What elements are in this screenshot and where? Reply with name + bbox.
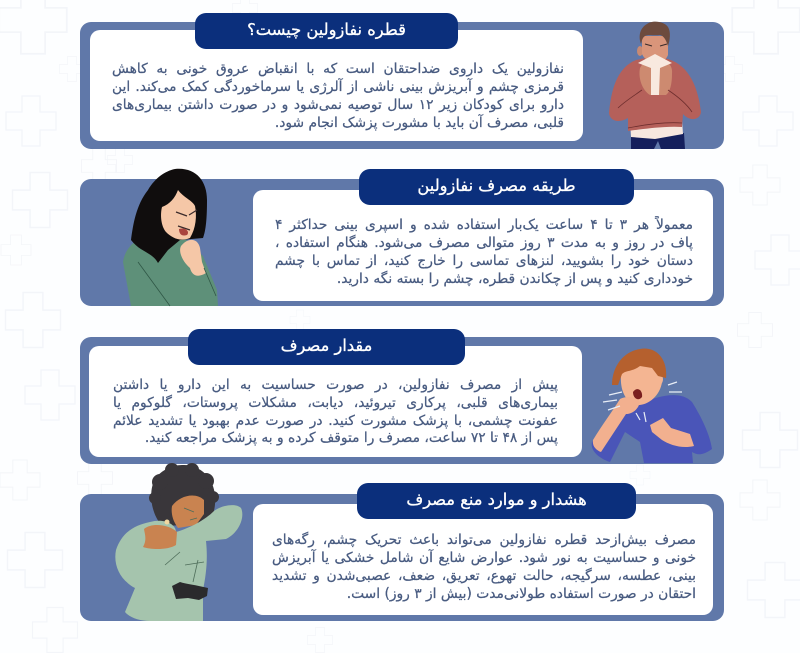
heading 1 xyxy=(195,13,458,49)
heading 2: طریقه مصرف نفازولین xyxy=(417,176,576,195)
text block 3: پیش از مصرف نفازولین، در صورت حساسیت به این دارو یا داشتن xyxy=(113,377,558,393)
text block 4 xyxy=(272,532,696,602)
heading 4 xyxy=(357,483,636,519)
text card 3 xyxy=(89,346,582,457)
text block 4: خونی و حساسیت به نور شود. عوارض شایع آن شامل خشکی یا آبریزش xyxy=(272,550,696,566)
panel: what is naphazoline xyxy=(80,22,724,149)
text block 2: دستان خود را بشویید، لنزهای تماسی را خارج کنید، از تماس با چشم xyxy=(275,253,693,269)
text block 4: احتقان در صورت استفاده طولانی‌مدت (بیش از ۳ روز) است. xyxy=(347,586,696,602)
text block 2 xyxy=(275,216,693,287)
text block 2: پاف در روز و به مدت ۳ روز متوالی مصرف می‌شود. هنگام استفاده ، xyxy=(275,235,693,251)
heading 4: هشدار و موارد منع مصرف xyxy=(406,490,587,509)
icon: woman coughing into elbow xyxy=(115,463,242,621)
heading 1: قطره نفازولین چیست؟ xyxy=(247,20,406,39)
panel: how to use xyxy=(80,179,724,306)
text block 3: عفونت چشمی، با پزشک مشورت کنید. در صورت عدم بهبود یا تشدید علائم xyxy=(113,413,558,429)
heading 3 xyxy=(188,329,465,365)
text block 1: قرمزی چشم و آبریزش بینی ناشی از آلرژی یا سرماخوردگی کمک می‌کند. این xyxy=(112,79,564,95)
text card 4 xyxy=(253,504,713,615)
text block 1: دارو برای کودکان زیر ۱۲ سال توصیه نمی‌شود و در صورت داشتن بیماری‌های xyxy=(112,97,564,113)
heading 2 xyxy=(359,169,634,205)
text block 2: خودداری کنید و پس از چکاندن قطره، چشم را بسته نگه دارید. xyxy=(337,271,693,287)
text block 3: بیماری‌های قلبی، پرکاری تیروئید، دیابت، مشکلات پروستات، گلوکوم یا xyxy=(113,395,558,411)
text block 2: معمولاً هر ۳ تا ۴ ساعت یک‌بار استفاده شده و اسپری بینی حداکثر ۴ xyxy=(275,217,693,233)
text card 2 xyxy=(253,190,713,301)
heading 3: مقدار مصرف xyxy=(281,336,372,355)
text block 4: بینی، عطسه، سرگیجه، حالت تهوع، تعریق، ضعف، عصبی‌شدن و تشدید xyxy=(272,568,696,584)
text block 1 xyxy=(112,61,564,131)
icon: man blowing nose xyxy=(609,22,701,149)
panel: warnings xyxy=(80,494,724,621)
text card 1 xyxy=(90,30,583,141)
text block 1: نفازولین یک داروی ضداحتقان است که با انقباض عروق خونی به کاهش xyxy=(112,61,564,77)
icon: coughing woman xyxy=(123,168,218,306)
text block 3 xyxy=(113,377,558,446)
text block 3: پس از ۴۸ تا ۷۲ ساعت، مصرف را متوقف کرده و به پزشک مراجعه کنید. xyxy=(145,430,558,446)
panel: dosage xyxy=(80,337,724,464)
text block 1: قلبی، مصرف آن باید با مشورت پزشک انجام شود. xyxy=(275,115,564,131)
text block 4: مصرف بیش‌ازحد قطره نفازولین می‌تواند باعث تحریک چشم، رگه‌های xyxy=(272,532,696,548)
icon: coughing boy xyxy=(592,348,712,463)
